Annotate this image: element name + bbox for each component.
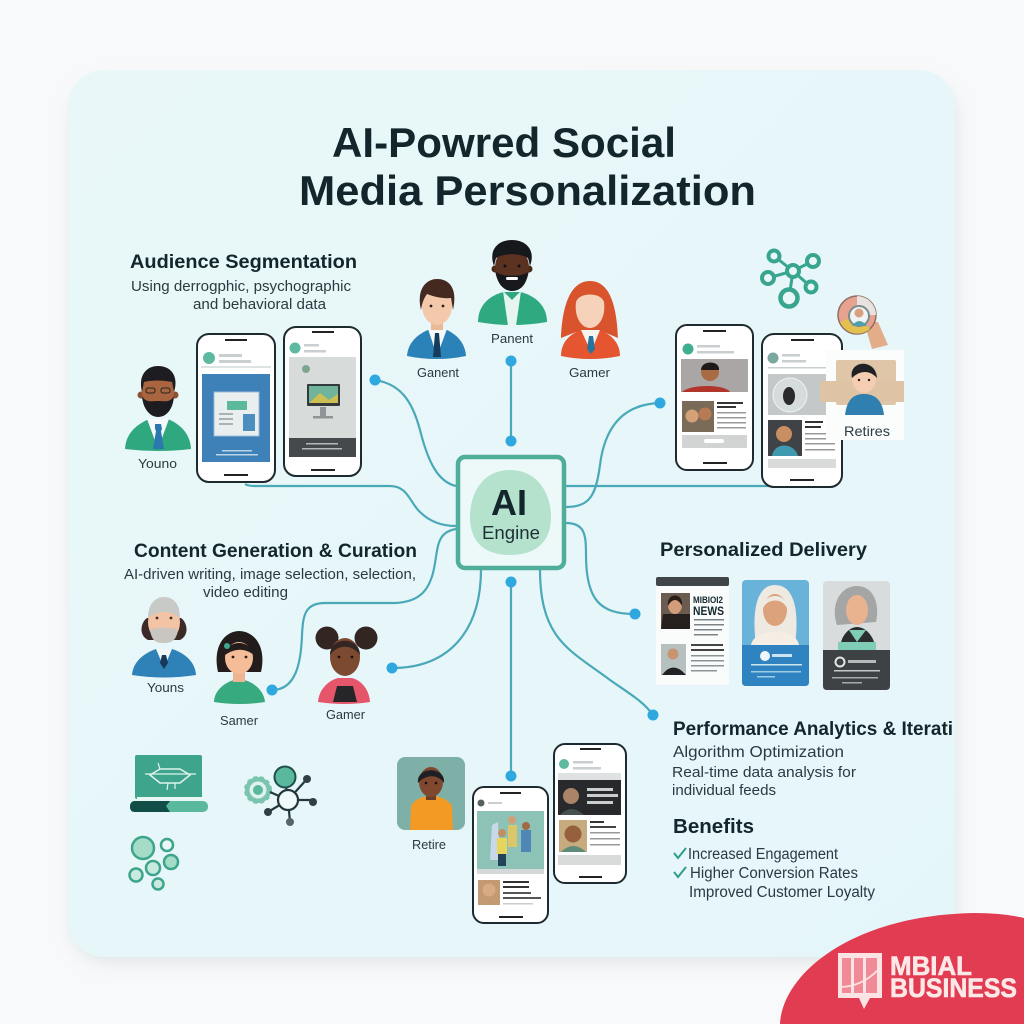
label: Gamer bbox=[326, 707, 366, 722]
icon: network bbox=[762, 250, 819, 306]
person: Panent bbox=[478, 240, 547, 346]
card: news: NEWS bbox=[693, 604, 724, 618]
text block: benefits: Increased Engagement bbox=[688, 846, 839, 863]
phone: article feed bbox=[554, 744, 626, 883]
text block: content generation: Content Generation & Curation bbox=[134, 540, 417, 562]
icon: magnifier and hand bbox=[838, 296, 888, 349]
icon: laptop bbox=[130, 755, 208, 812]
logo badge: BUSINESS bbox=[890, 973, 1017, 1003]
card: grey profile bbox=[823, 581, 890, 690]
text block: benefits bbox=[673, 815, 875, 901]
text block: content generation: AI-driven writing, image selection, selection, bbox=[124, 566, 416, 583]
phone: blue post bbox=[197, 334, 275, 482]
person: Samer bbox=[214, 631, 265, 728]
person: Youns bbox=[132, 597, 196, 695]
logo badge bbox=[780, 913, 1024, 1024]
text block: audience segmentation: Audience Segmentation bbox=[130, 251, 357, 273]
text block: performance analytics bbox=[672, 719, 953, 799]
text block: audience segmentation: Using derrogphic, psychographic bbox=[131, 278, 352, 295]
connector nodes bbox=[266, 356, 666, 782]
person card: Retires bbox=[820, 350, 904, 440]
label: Youno bbox=[138, 456, 177, 471]
title bbox=[299, 119, 756, 214]
phone: fingerprint feed bbox=[762, 334, 842, 487]
card: news bbox=[656, 577, 729, 685]
phone: monitor post bbox=[284, 327, 361, 476]
text block: audience segmentation bbox=[130, 251, 357, 313]
person: Ganent bbox=[407, 279, 466, 380]
text block: content generation bbox=[124, 540, 417, 601]
text block: audience segmentation: and behavioral data bbox=[193, 296, 327, 313]
person: Gamer red hair bbox=[561, 281, 620, 380]
title: Media Personalization bbox=[299, 167, 756, 214]
panel: background card bbox=[68, 70, 956, 962]
text block: benefits: Higher Conversion Rates bbox=[690, 865, 858, 882]
card: blue profile bbox=[742, 580, 809, 686]
text block: content generation: video editing bbox=[203, 584, 288, 601]
label: Youns bbox=[147, 680, 185, 695]
label: Retires bbox=[844, 423, 890, 439]
text block: benefits: Improved Customer Loyalty bbox=[689, 884, 875, 901]
text block: performance analytics: Performance Analytics & Iterati bbox=[673, 719, 953, 740]
connector lines bbox=[245, 361, 770, 776]
label: Ganent bbox=[417, 365, 459, 380]
person: Gamer with controller bbox=[316, 626, 378, 722]
icon: logo book chart bbox=[838, 953, 882, 1009]
title: AI-Powred Social bbox=[332, 119, 676, 166]
phone: portrait feed bbox=[676, 325, 753, 470]
label: Panent bbox=[491, 331, 533, 346]
person tile: Retire bbox=[397, 757, 465, 852]
person: Youno bbox=[125, 366, 191, 471]
card: news: MIBIOI2 bbox=[693, 595, 723, 605]
AI engine hub: Engine bbox=[482, 523, 540, 543]
AI engine hub bbox=[458, 457, 564, 568]
logo badge: MBIAL bbox=[890, 951, 972, 981]
text block: performance analytics: individual feeds bbox=[672, 782, 776, 799]
AI engine hub: AI bbox=[491, 482, 527, 523]
icon: bubble cluster bbox=[130, 837, 178, 890]
label: Gamer bbox=[569, 365, 611, 380]
text block: benefits: Benefits bbox=[673, 815, 754, 838]
text block: performance analytics: Real-time data analysis for bbox=[672, 764, 856, 781]
label: Samer bbox=[220, 713, 259, 728]
label: Retire bbox=[412, 837, 446, 852]
icon: check marks bbox=[674, 848, 686, 877]
icon: gear and nodes bbox=[245, 766, 317, 826]
text block: performance analytics: Algorithm Optimization bbox=[673, 744, 844, 761]
phone: group photo feed bbox=[473, 787, 548, 923]
heading: personalized delivery: Personalized Delivery bbox=[660, 539, 867, 561]
